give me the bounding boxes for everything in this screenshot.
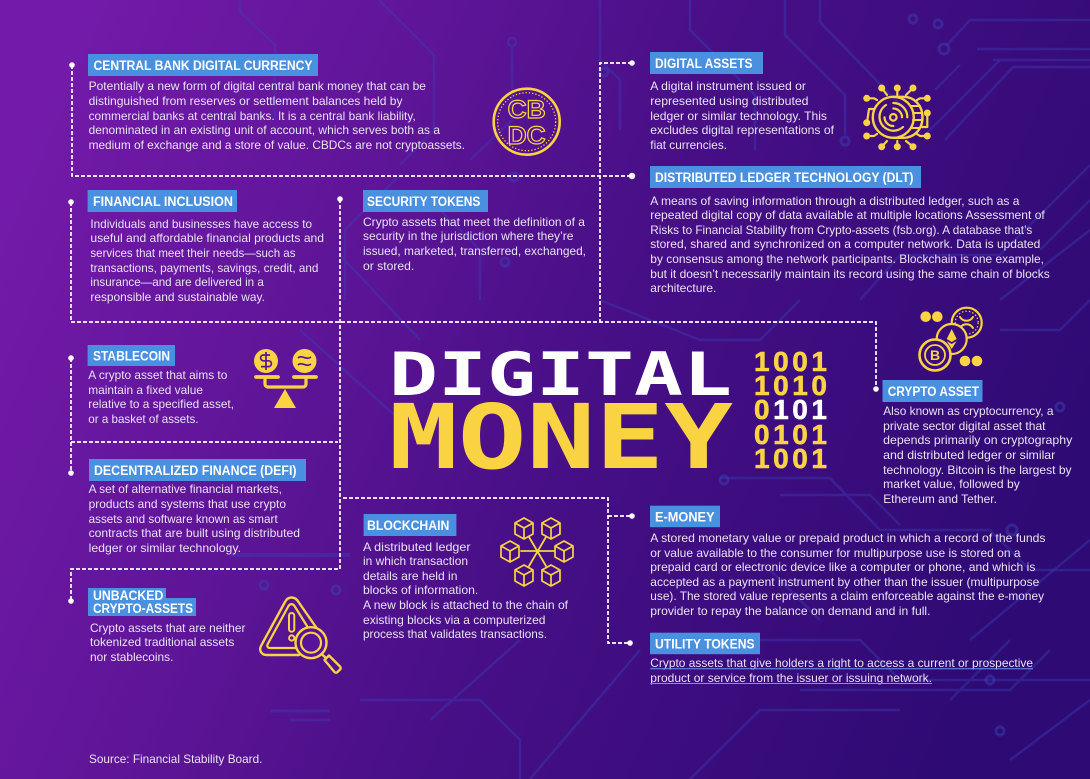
text: digital assets definition: represented using distributed [650, 94, 808, 108]
heading: digital assets: DIGITAL ASSETS [655, 56, 752, 71]
binary digits block: 0101 [754, 419, 827, 450]
text: distributed ledger technology definition: A means of saving information through a distributed ledger, such as a [650, 194, 1020, 208]
icon: network of blocks [501, 518, 573, 586]
text: stablecoin definition: or a basket of assets. [88, 412, 198, 426]
title line: digital: DIGITAL [389, 340, 732, 410]
text: blockchain definition: A new block is attached to the chain of [363, 598, 569, 612]
text: financial inclusion definition: responsible and sustainable way. [90, 290, 265, 304]
panel: e-money [650, 506, 1046, 618]
text: e-money definition: provider to repay the balance on demand and in full. [650, 604, 930, 618]
text: e-money definition: or value available to the consumer for multipurpose use is stored on a [650, 546, 1021, 560]
text: financial inclusion definition: services that meet their needs—such as [90, 246, 296, 260]
text: decentralized finance definition: contracts that are built using distributed [89, 526, 300, 540]
text: security tokens definition: Crypto assets that meet the definition of a [363, 215, 585, 229]
text: distributed ledger technology definition: stored, shared and synchronized on a computer network. Data is updated [650, 237, 1040, 251]
text: e-money definition: prepaid card or electronic device like a computer or phone, and which is [650, 560, 1035, 574]
text: unbacked crypto-assets definition: nor stablecoins. [90, 650, 173, 664]
text: decentralized finance definition [89, 482, 300, 555]
text: central bank digital currency definition: denominated in an existing unit of account, which serves both as a [89, 123, 440, 137]
icon: CBDC coin: DC [508, 122, 546, 150]
text: security tokens definition: security in the jurisdiction where they’re [363, 229, 574, 243]
text: crypto asset definition: technology. Bitcoin is the largest by [883, 463, 1072, 477]
heading: decentralized finance [89, 459, 306, 481]
text: stablecoin definition [88, 368, 234, 426]
text: utility tokens definition: product or service from the issuer or issuing network. [650, 671, 932, 685]
text: central bank digital currency definition [89, 79, 465, 152]
text: digital assets definition: excludes digital representations of [650, 123, 835, 137]
heading: financial inclusion: FINANCIAL INCLUSION [93, 194, 233, 209]
panel: crypto asset [882, 308, 1072, 506]
text: blockchain definition: existing blocks via a computerized [363, 613, 546, 627]
heading: e-money: E-MONEY [655, 510, 715, 524]
text: distributed ledger technology definition [650, 194, 1050, 295]
text: unbacked crypto-assets definition: tokenized traditional assets [90, 635, 234, 649]
icon: warning triangle with magnifying glass [260, 598, 341, 673]
text: decentralized finance definition: A set of alternative financial markets, [89, 482, 282, 496]
heading: blockchain [364, 514, 456, 536]
background circuit traces [230, 0, 1090, 779]
text: crypto asset definition: market value, followed by [883, 477, 1020, 491]
heading: distributed ledger technology: DISTRIBUTED LEDGER TECHNOLOGY (DLT) [655, 170, 913, 185]
text: central bank digital currency definition: Potentially a new form of digital central bank money that can be [89, 79, 426, 93]
text: unbacked crypto-assets definition [90, 621, 245, 664]
text: security tokens definition: issued, marketed, transferred, exchanged, [363, 244, 586, 258]
text: e-money definition: use). The stored value represents a claim enforceable against the e-money [650, 589, 1044, 603]
dashed connector lines [68, 60, 879, 646]
heading: blockchain: BLOCKCHAIN [367, 518, 449, 533]
icon: CBDC coin: CB [508, 96, 546, 124]
text: stablecoin definition: A crypto asset that aims to [88, 368, 228, 382]
text: crypto asset definition [883, 404, 1072, 506]
text: blockchain definition: blocks of information. [363, 583, 478, 597]
heading: utility tokens: UTILITY TOKENS [655, 636, 755, 652]
text: e-money definition [650, 531, 1046, 618]
text: blockchain definition: in which transaction [363, 554, 468, 568]
binary digits block: 1001 [754, 346, 827, 377]
text: digital assets definition: A digital instrument issued or [650, 79, 806, 93]
panel: utility tokens [650, 633, 1033, 685]
heading: unbacked crypto-assets [88, 588, 196, 616]
heading: central bank digital currency [88, 54, 318, 76]
panel: central bank digital currency [88, 54, 560, 155]
text: distributed ledger technology definition: by consensus among the network participants. Blockchain is one example, [650, 252, 1044, 266]
binary digits block: 0101 [754, 394, 827, 425]
text: distributed ledger technology definition: repeated digital copy of data available at multiple locations Assessment of [650, 208, 1045, 222]
heading: financial inclusion [88, 190, 237, 212]
heading: distributed ledger technology [650, 166, 921, 188]
text: digital assets definition: ledger or similar technology. This [650, 109, 827, 123]
text: utility tokens definition [650, 656, 1033, 685]
heading: stablecoin [88, 345, 175, 366]
heading: unbacked crypto-assets: UNBACKED [93, 588, 164, 603]
text: blockchain definition: details are held in [363, 569, 457, 583]
text: decentralized finance definition: ledger or similar technology. [89, 541, 241, 555]
binary digits block [754, 346, 827, 474]
title: digital money [389, 340, 734, 489]
source note: Source: Financial Stability Board. [89, 752, 262, 766]
text: stablecoin definition: relative to a specified asset, [88, 397, 234, 411]
text: e-money definition: A stored monetary value or prepaid product in which a record of the funds [650, 531, 1046, 545]
text: financial inclusion definition: Individuals and businesses have access to [90, 217, 312, 231]
text: security tokens definition [363, 215, 586, 273]
text: financial inclusion definition: useful and affordable financial products and [90, 231, 324, 245]
text: central bank digital currency definition: commercial banks at central banks. It is a central bank liability, [89, 109, 416, 123]
title line: money: MONEY [389, 385, 734, 489]
heading: central bank digital currency: CENTRAL BANK DIGITAL CURRENCY [94, 58, 312, 73]
heading: security tokens: SECURITY TOKENS [367, 194, 480, 209]
heading: digital assets [650, 52, 763, 74]
heading: unbacked crypto-assets: CRYPTO-ASSETS [93, 601, 193, 616]
panel: security tokens [363, 190, 586, 273]
icon: stacked crypto coins: B [930, 347, 940, 363]
binary digits block: 1010 [754, 370, 827, 401]
text: digital assets definition [650, 79, 835, 152]
text: central bank digital currency definition: distinguished from reserves or settlement balances held by [89, 94, 403, 108]
panel: stablecoin [88, 345, 316, 426]
icon: digital coin with circuit nodes [863, 84, 931, 150]
text: crypto asset definition: Also known as cryptocurrency, a [883, 404, 1054, 418]
icon: CBDC coin [494, 89, 560, 155]
text: central bank digital currency definition: medium of exchange and a store of value. CBDCs are not cryptoassets. [89, 138, 465, 152]
icon: stacked crypto coins [920, 308, 982, 370]
text: blockchain definition [363, 540, 569, 641]
text: blockchain definition: process that validates transactions. [363, 627, 547, 641]
heading: crypto asset [882, 380, 982, 402]
text: financial inclusion definition: insurance—and are delivered in a [90, 275, 264, 289]
text: distributed ledger technology definition: architecture. [650, 281, 716, 295]
panel: distributed ledger technology [650, 166, 1050, 295]
panel: unbacked crypto-assets [88, 588, 341, 673]
text: distributed ledger technology definition: but it doesn’t necessarily maintain its record using the same chain of blocks [650, 267, 1050, 281]
text: crypto asset definition: private sector digital asset that [883, 419, 1046, 433]
text: e-money definition: accepted as a payment instrument by other than the issuer (multipurpose [650, 575, 1040, 589]
heading: e-money [650, 506, 720, 527]
text: unbacked crypto-assets definition: Crypto assets that are neither [90, 621, 245, 635]
text: blockchain definition: A distributed ledger [363, 540, 471, 554]
panel: decentralized finance [89, 459, 306, 555]
text: utility tokens definition: Crypto assets that give holders a right to access a current or prospective [650, 656, 1033, 670]
heading: crypto asset: CRYPTO ASSET [888, 384, 980, 399]
heading: stablecoin: STABLECOIN [93, 348, 170, 364]
text: decentralized finance definition: products and systems that use crypto [89, 497, 286, 511]
text: decentralized finance definition: assets and software known as smart [89, 512, 278, 526]
text: security tokens definition: or stored. [363, 259, 414, 273]
text: financial inclusion definition: transactions, payments, savings, credit, and [90, 261, 318, 275]
text: crypto asset definition: depends primarily on cryptography [883, 433, 1072, 447]
text: distributed ledger technology definition: Risks to Financial Stability from Crypto-assets (fsb.org). A database that’s [650, 223, 1032, 237]
text: digital assets definition: fiat currencies. [650, 138, 727, 152]
heading: decentralized finance: DECENTRALIZED FINANCE (DEFI) [94, 463, 296, 478]
text: crypto asset definition: Ethereum and Tether. [883, 492, 997, 506]
heading: utility tokens [650, 633, 760, 654]
binary digits block: 1001 [754, 443, 827, 474]
text: stablecoin definition: maintain a fixed value [88, 383, 203, 397]
text: financial inclusion definition [90, 217, 324, 304]
icon: balance scale with coins [254, 349, 316, 408]
panel: digital assets [650, 52, 931, 152]
heading: security tokens [363, 190, 488, 212]
panel: blockchain [363, 514, 573, 641]
panel: financial inclusion [88, 190, 324, 304]
text: crypto asset definition: and distributed ledger or similar [883, 448, 1055, 462]
